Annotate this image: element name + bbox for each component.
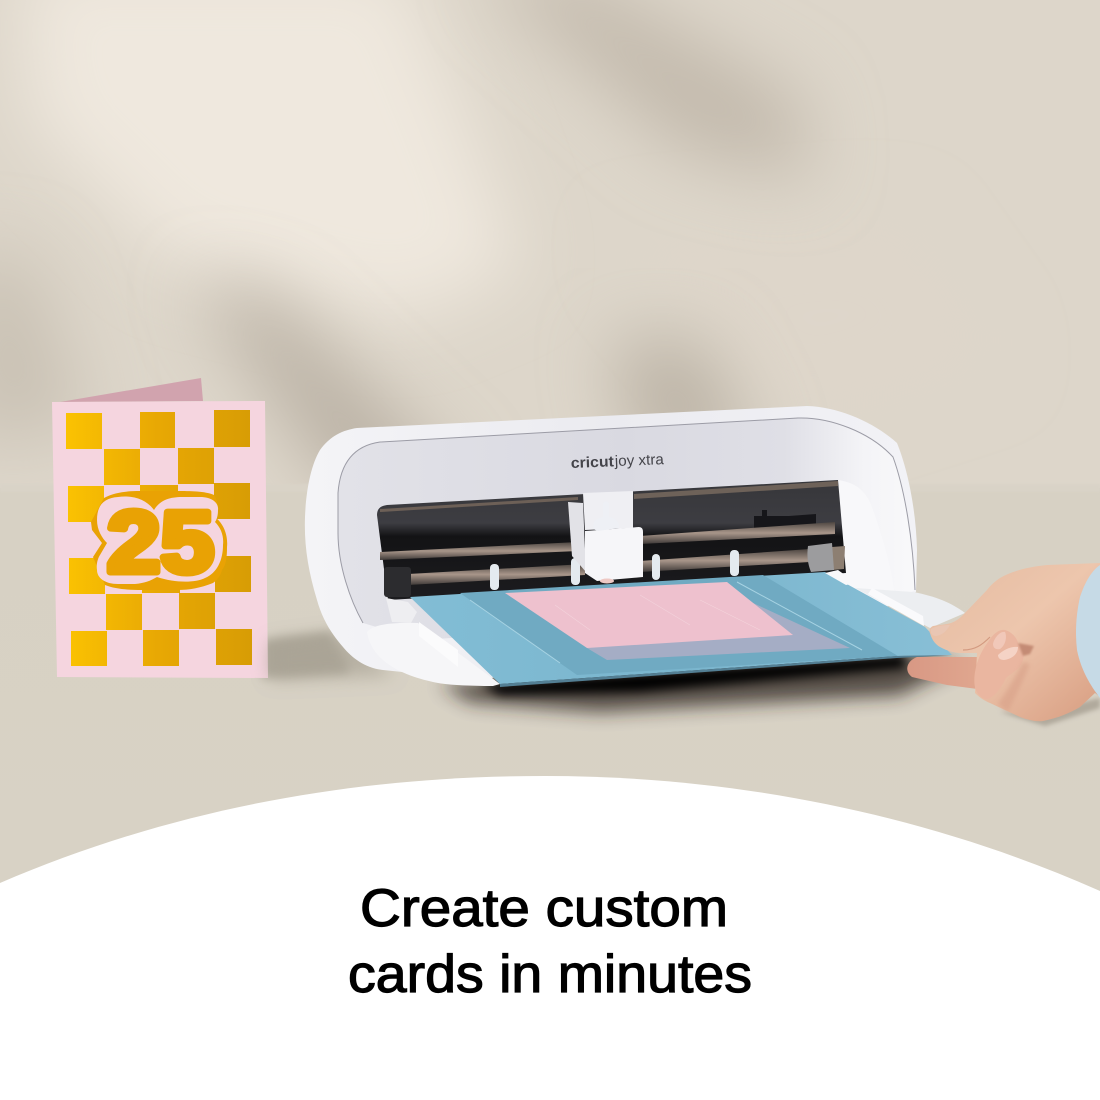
headline: [348, 879, 752, 1004]
pink card stock: [505, 582, 793, 648]
gold checker squares: [66, 410, 252, 666]
left paper guide: [386, 598, 417, 623]
sleeve: [1076, 565, 1100, 698]
light patches: [20, 0, 520, 320]
top seam: [338, 418, 915, 623]
palm and thumb: [929, 563, 1100, 721]
number 25 badge: 25: [107, 494, 214, 591]
card back flap: [60, 378, 203, 402]
carriage: [568, 491, 643, 584]
greeting card: [52, 378, 350, 678]
lilac backing sheet: [587, 583, 850, 660]
background wall: [0, 0, 1100, 500]
right tray: [855, 588, 965, 628]
machine shadows: [270, 632, 960, 712]
wall shadow streaks: [480, 0, 810, 180]
black roller: [384, 567, 411, 597]
upper rail: [380, 497, 578, 512]
small bracket: [754, 510, 816, 528]
index finger: [907, 657, 985, 690]
mat lines: [470, 582, 862, 663]
finger gap shadow: [1018, 643, 1034, 656]
headline: cards in minutes: [348, 945, 752, 1004]
white curved footer: [0, 776, 1100, 1100]
star wheels: [490, 550, 739, 590]
mat lower edge: [500, 655, 952, 687]
white right side panel: [838, 480, 894, 592]
brand logo: [571, 451, 665, 472]
cutting head: [585, 527, 643, 581]
mat: [410, 572, 952, 687]
brand logo: joy xtra: [613, 451, 665, 470]
window opening: [377, 480, 846, 600]
machine lid outer body: [305, 406, 917, 680]
brand logo: cricut: [571, 453, 614, 472]
grey roller: [807, 543, 834, 572]
folded fingers: [974, 630, 1024, 699]
number 25 badge: [91, 491, 227, 591]
knob: [593, 502, 619, 531]
table surface: [0, 484, 1100, 908]
middle rod: [380, 542, 578, 560]
right paper guides: [825, 570, 856, 585]
thumb crease: [963, 637, 990, 650]
left tray: [367, 623, 500, 686]
hand holding mat: [907, 563, 1100, 726]
hand contact shadow: [1000, 698, 1100, 726]
card front: [52, 401, 268, 678]
fingernails: [993, 632, 1006, 649]
cut lines: [555, 595, 760, 630]
mat darker band: [460, 575, 898, 675]
lower rod: [408, 564, 585, 585]
card shadow: [262, 632, 350, 678]
machine front face: [338, 418, 915, 640]
cutting machine: [305, 406, 965, 687]
headline: Create custom: [360, 879, 728, 938]
